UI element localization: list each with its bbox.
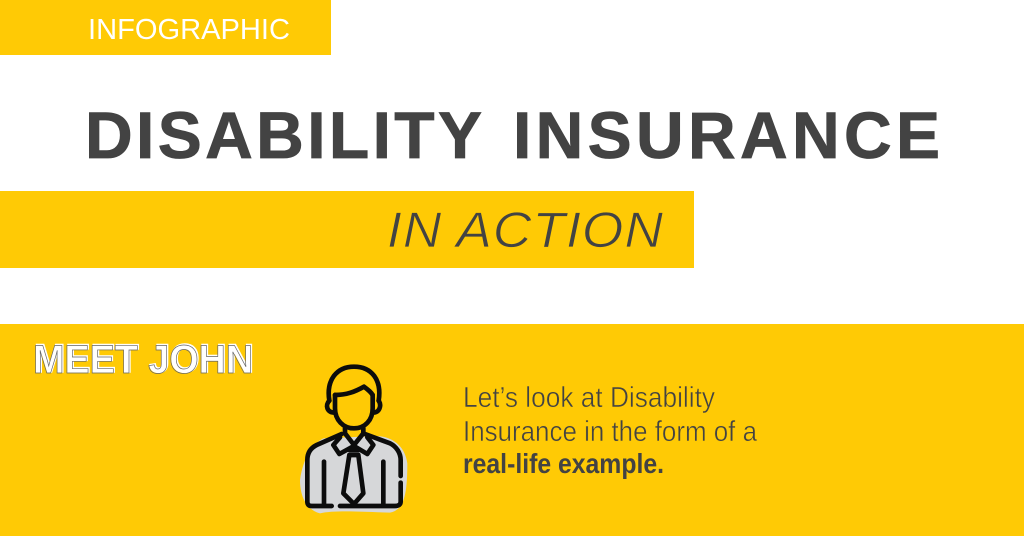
- icon: man in shirt and tie: [300, 367, 407, 513]
- text block: description: Insurance in the form of a: [463, 416, 758, 448]
- title: INSURANCE: [513, 98, 940, 172]
- text block: description: Let’s look at Disability: [463, 382, 715, 414]
- subtitle banner: in action: IN ACTION: [387, 202, 664, 258]
- heading: meet john: MEET JOHN: [34, 337, 254, 381]
- text block: description: real-life example.: [463, 448, 664, 479]
- heading: meet john: MEET JOHN: [33, 338, 253, 382]
- title: [85, 98, 940, 172]
- text block: description: [463, 382, 758, 479]
- panel: meet john: [0, 324, 1024, 536]
- tag banner: infographic: INFOGRAPHIC: [88, 14, 290, 46]
- tag banner: infographic: [0, 0, 331, 55]
- subtitle banner: in action: [0, 191, 694, 268]
- title: DISABILITY: [85, 98, 482, 172]
